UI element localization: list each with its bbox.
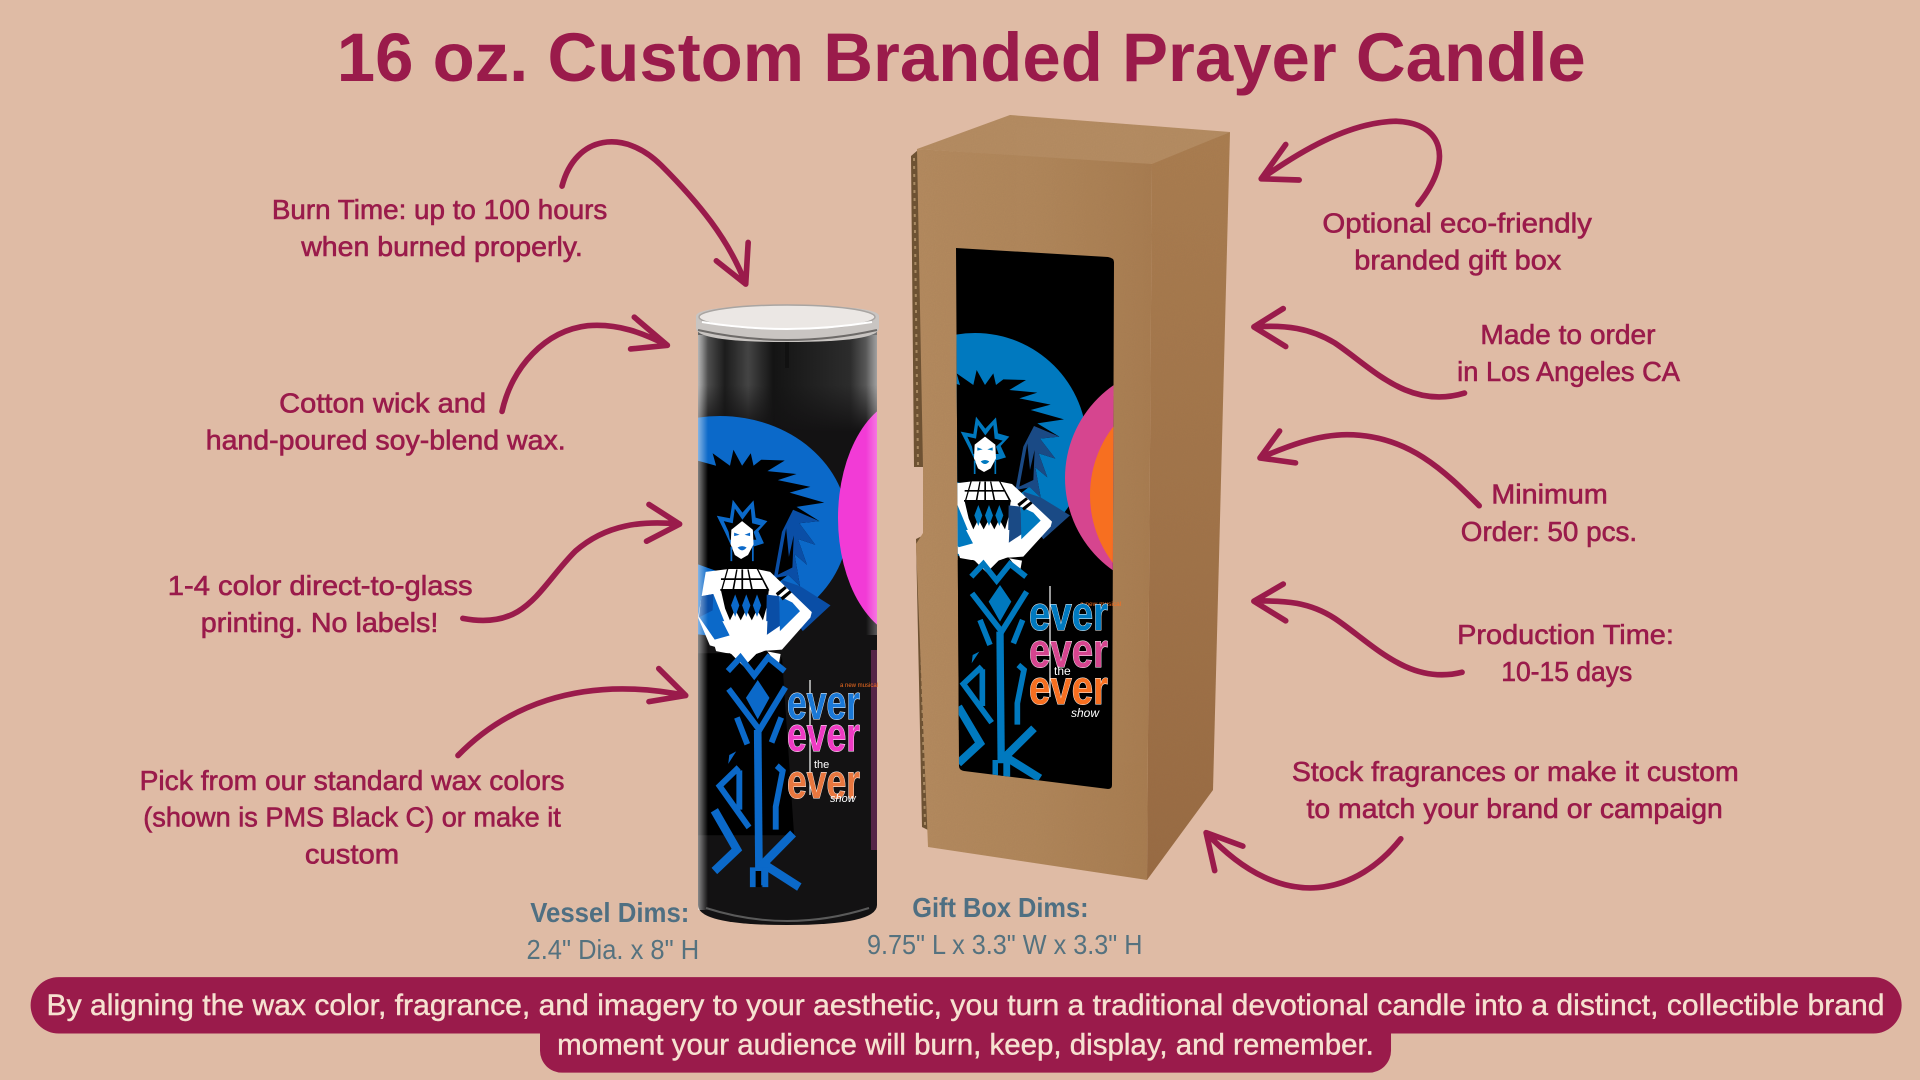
callout: printing: 1-4 color direct-to-glass — [168, 570, 473, 601]
title: 16 oz. Custom Branded Prayer Candle — [337, 19, 1586, 96]
candle body — [698, 330, 877, 925]
callout: gift box: Optional eco-friendly — [1322, 208, 1592, 239]
box label artwork — [956, 248, 1121, 789]
candle logo: a new musical — [840, 683, 878, 689]
arrow: minimum order — [1260, 431, 1479, 506]
callout: wax colors: custom — [305, 838, 399, 869]
box front panel — [916, 149, 1152, 880]
bottom banner — [31, 977, 1902, 1073]
gift box dimensions — [867, 892, 1142, 960]
box logo — [1029, 586, 1122, 720]
candle — [696, 304, 879, 925]
callout: gift box: branded gift box — [1354, 244, 1561, 275]
vessel dimensions — [527, 897, 699, 965]
label background — [956, 248, 1114, 789]
arrow: production time — [1254, 584, 1462, 675]
banner text: By aligning the wax color, fragrance, and imagery to your aesthetic, you turn a traditional devotional candle into a distinct, collectible brand — [47, 989, 1884, 1022]
arrow: fragrances — [1206, 833, 1401, 888]
box logo: ever — [1029, 625, 1108, 678]
callout: printing: printing. No labels! — [201, 607, 438, 638]
gift box dimensions: Gift Box Dims: — [912, 892, 1089, 923]
callout: burn time: when burned properly. — [300, 231, 583, 262]
callout: made to order: in Los Angeles CA — [1457, 356, 1681, 387]
wick — [785, 338, 789, 368]
callout: fragrances: Stock fragrances or make it custom — [1292, 756, 1739, 787]
gift box — [911, 115, 1230, 880]
callout: fragrances: to match your brand or campaign — [1307, 793, 1723, 824]
callout: minimum order: Minimum — [1491, 478, 1608, 509]
callout: minimum order: Order: 50 pcs. — [1461, 516, 1637, 547]
label art — [956, 333, 1114, 780]
candle logo: ever — [787, 756, 860, 809]
banner shape — [31, 977, 1902, 1073]
callout: wax colors — [140, 765, 564, 869]
box logo: ever — [1029, 662, 1108, 715]
callout: production time: Production Time: — [1457, 619, 1674, 650]
box logo: ever — [1029, 588, 1108, 641]
vessel dimensions: Vessel Dims: — [530, 897, 689, 928]
candle print — [698, 412, 877, 891]
box top flap — [917, 115, 1230, 165]
callout: burn time: Burn Time: up to 100 hours — [272, 194, 607, 225]
arrow: printing — [463, 504, 680, 621]
wax and glass top — [698, 332, 877, 432]
callout: fragrances — [1292, 756, 1739, 824]
vessel dimensions: 2.4" Dia. x 8" H — [527, 934, 699, 965]
corrugated edge — [911, 150, 932, 832]
callout: gift box — [1322, 208, 1592, 275]
candle logo: ever — [787, 677, 860, 730]
candle logo — [787, 677, 878, 809]
arrow: gift box — [1261, 121, 1439, 204]
candle logo: the — [814, 759, 829, 771]
callout: made to order: Made to order — [1480, 319, 1656, 350]
callout: wax colors: (shown is PMS Black C) or make it — [143, 802, 561, 833]
banner text: moment your audience will burn, keep, display, and remember. — [557, 1028, 1374, 1061]
gift box dimensions: 9.75" L x 3.3" W x 3.3" H — [867, 929, 1142, 960]
arrow: wax colors — [458, 669, 686, 756]
callout: production time — [1457, 619, 1674, 687]
callout: minimum order — [1461, 478, 1637, 547]
box logo: the — [1054, 664, 1071, 678]
candle logo: show — [830, 793, 857, 805]
callout: wick and wax: Cotton wick and — [279, 388, 486, 419]
callout: made to order — [1457, 319, 1681, 387]
glass highlights — [698, 335, 877, 921]
candle logo: ever — [787, 709, 860, 762]
callout: production time: 10-15 days — [1501, 656, 1632, 687]
callout: wick and wax: hand-poured soy-blend wax. — [206, 424, 566, 455]
arrow: wick and wax — [502, 317, 667, 411]
banner text — [47, 989, 1884, 1061]
box logo: show — [1071, 706, 1100, 720]
box side panel — [1147, 132, 1230, 880]
arrow: burn time — [562, 142, 748, 284]
callout: printing — [168, 570, 473, 638]
callout: burn time — [272, 194, 607, 262]
glass rim — [696, 305, 879, 342]
box logo: a new musical — [1080, 601, 1122, 608]
arrow: made to order — [1254, 309, 1464, 397]
callout: wick and wax — [206, 388, 566, 455]
callout: wax colors: Pick from our standard wax colors — [140, 765, 564, 796]
